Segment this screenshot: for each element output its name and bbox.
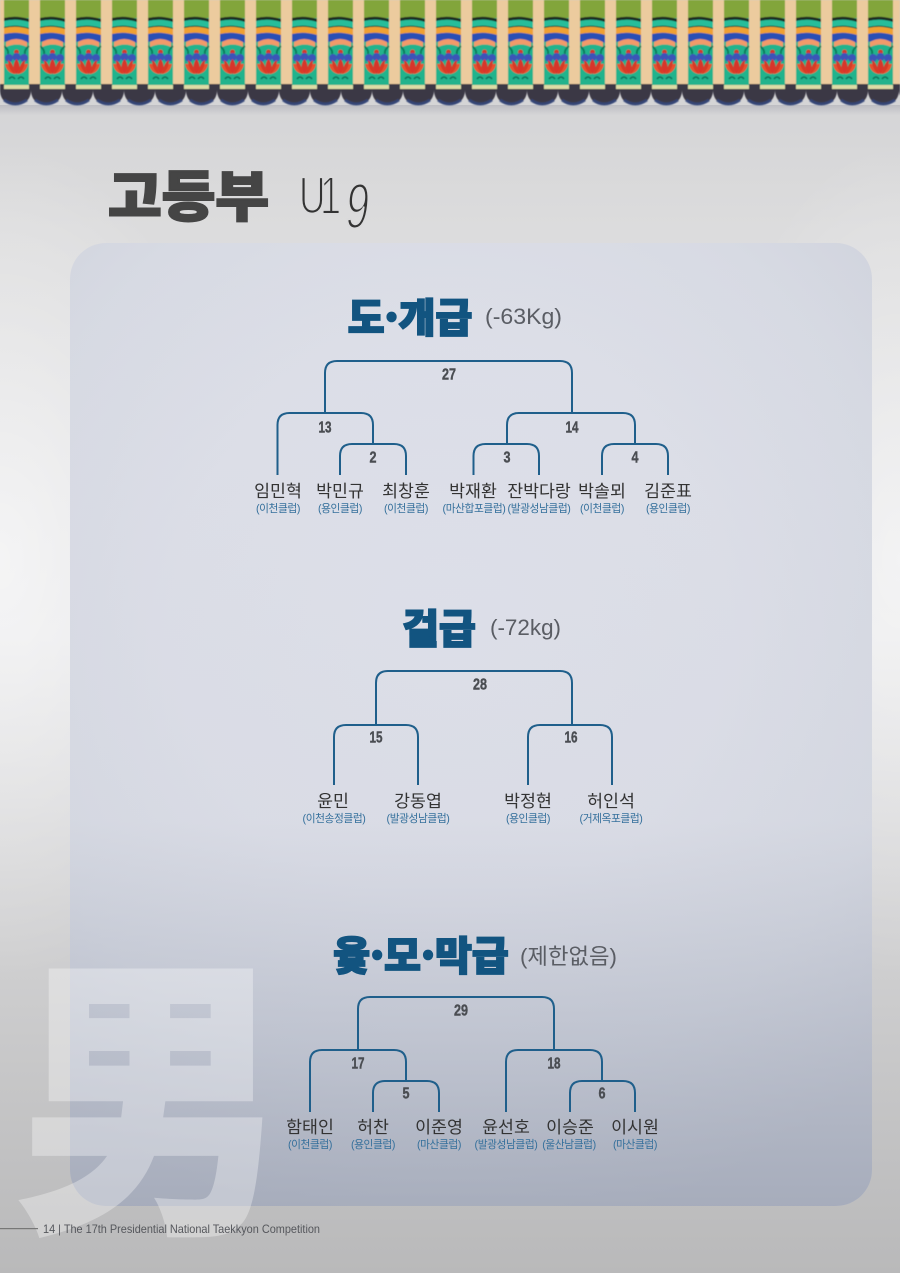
match numbers: 15 [370,730,383,746]
clubs: (마산클럽) [613,1138,657,1151]
match numbers: 17 [352,1056,365,1072]
match numbers: 14 [566,420,579,436]
clubs: (용인클럽) [318,502,362,515]
footer: 14 | The 17th Presidential National Taekkyon Competition [43,1223,320,1236]
competitors: 박민규 [316,481,364,501]
handwritten U19: 1 [320,165,341,226]
clubs [256,502,690,515]
clubs: (발광성남클럽) [475,1138,537,1151]
bracket lines [278,361,668,475]
competitors: 이승준 [546,1117,594,1137]
section: 윷·모·막급 [286,924,659,1151]
match numbers: 5 [402,1086,410,1102]
match numbers: 4 [632,450,639,466]
competitors: 박정현 [504,791,552,811]
clubs: (발광성남클럽) [387,812,449,825]
clubs: (발광성남클럽) [508,502,570,515]
main heading: 고등부 [108,155,269,232]
clubs: (용인클럽) [351,1138,395,1151]
competitors: 김준표 [644,481,692,501]
competitors: 최창훈 [382,481,430,501]
weight limit: (-63Kg) [485,304,562,329]
match numbers: 28 [473,676,487,694]
competitors [286,1117,659,1137]
clubs: (이천클럽) [580,502,624,515]
bracket lines [310,997,635,1112]
section: 도·개급 [254,286,692,515]
handwritten U19 [299,165,373,242]
weight limit: (-72kg) [490,615,561,640]
clubs [288,1138,657,1151]
competitors [317,791,635,811]
match numbers: 16 [564,730,578,746]
match numbers: 13 [318,420,332,436]
match numbers: 6 [598,1086,606,1102]
clubs [303,812,642,825]
competitors: 윤선호 [482,1117,530,1137]
competitors: 박재환 [449,481,497,501]
section: 걸급 [303,597,642,825]
competitors [254,481,692,501]
match numbers: 2 [370,450,377,466]
match numbers [370,676,578,746]
section heading: 도·개급 [348,286,472,344]
section heading: 윷·모·막급 [333,924,509,982]
competitors: 이준영 [415,1117,463,1137]
clubs: (마산합포클럽) [443,502,505,515]
match numbers: 18 [548,1056,561,1072]
clubs: (이천클럽) [288,1138,332,1151]
weight limit: (제한없음) [520,944,617,969]
clubs: (이천클럽) [256,502,300,515]
roof eaves band [0,0,900,115]
match numbers: 29 [454,1002,468,1020]
match numbers: 27 [442,366,456,384]
competitors: 잔박다랑 [507,481,571,501]
match numbers: 3 [504,450,511,466]
clubs: (마산클럽) [417,1138,461,1151]
competitors: 임민혁 [254,481,302,501]
handwritten U19: U [299,166,326,225]
clubs: (용인클럽) [646,502,690,515]
panel: brackets background [70,243,872,1206]
competitors: 박솔뫼 [578,481,626,501]
bracket lines [334,671,612,785]
competitors: 허찬 [357,1117,389,1137]
competitors: 이시원 [611,1117,659,1137]
section heading: 걸급 [402,597,476,655]
clubs: (이천송정클럽) [303,812,365,825]
competitors: 함태인 [286,1117,334,1137]
competitors: 강동엽 [394,791,442,811]
match numbers [318,366,639,466]
competitors: 허인석 [587,791,635,811]
competitors: 윤민 [317,791,349,811]
clubs: (거제옥포클럽) [580,812,642,825]
clubs: (용인클럽) [506,812,550,825]
match numbers [352,1002,606,1102]
clubs: (이천클럽) [384,502,428,515]
handwritten U19: 9 [343,170,373,242]
clubs: (울산남클럽) [542,1138,596,1151]
